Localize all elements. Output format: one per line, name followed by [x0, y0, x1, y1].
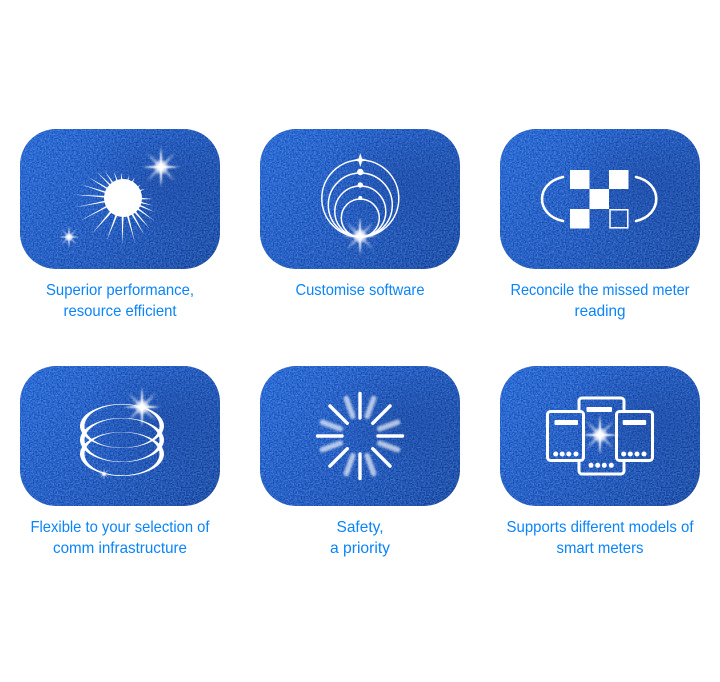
card background: [500, 366, 700, 506]
caption: Supports different models of: [506, 519, 694, 536]
caption: [30, 519, 210, 557]
caption: comm infrastructure: [53, 540, 187, 557]
icon: stacked rings: [80, 404, 164, 476]
caption: [510, 282, 690, 320]
card background: [500, 129, 700, 269]
icon: small sparkle: [59, 226, 79, 248]
caption: resource efficient: [64, 303, 177, 320]
caption: [46, 282, 194, 320]
caption: Reconcile the missed meter: [510, 282, 690, 299]
card background: [260, 366, 460, 506]
caption: a priority: [330, 540, 390, 557]
caption: Safety,: [336, 519, 384, 536]
panel: safety: [260, 366, 460, 557]
panel: superior performance: [20, 129, 220, 320]
icon: sun with rays: [74, 170, 155, 245]
icon: right bracket arc: [636, 177, 656, 221]
icon: sparkle: [342, 217, 378, 255]
icon: tiny sparkle: [98, 468, 110, 480]
icon: radial spinner: [318, 394, 402, 478]
icon: left bracket arc: [542, 177, 563, 221]
caption: Customise software: [296, 282, 425, 299]
card background: [20, 129, 220, 269]
card background: [260, 129, 460, 269]
icon: checker grid with one missing cell: [570, 170, 628, 228]
icon: large sparkle: [142, 147, 180, 187]
caption: reading: [574, 303, 626, 320]
panel: reconcile missed reading: [500, 129, 700, 320]
panel: flexible comm infrastructure: [20, 366, 220, 557]
panel: customise software: [260, 129, 460, 299]
card background: [20, 366, 220, 506]
caption: Flexible to your selection of: [30, 519, 210, 536]
icon: nested orbits: [322, 153, 399, 237]
caption: [330, 519, 390, 557]
icon: sparkle: [581, 415, 619, 455]
caption: Superior performance,: [46, 282, 194, 299]
icon: large sparkle: [123, 387, 161, 427]
icon: three smart meters: [548, 398, 652, 474]
panel: supports different meters: [500, 366, 700, 557]
caption: [506, 519, 694, 557]
caption: smart meters: [556, 540, 644, 557]
